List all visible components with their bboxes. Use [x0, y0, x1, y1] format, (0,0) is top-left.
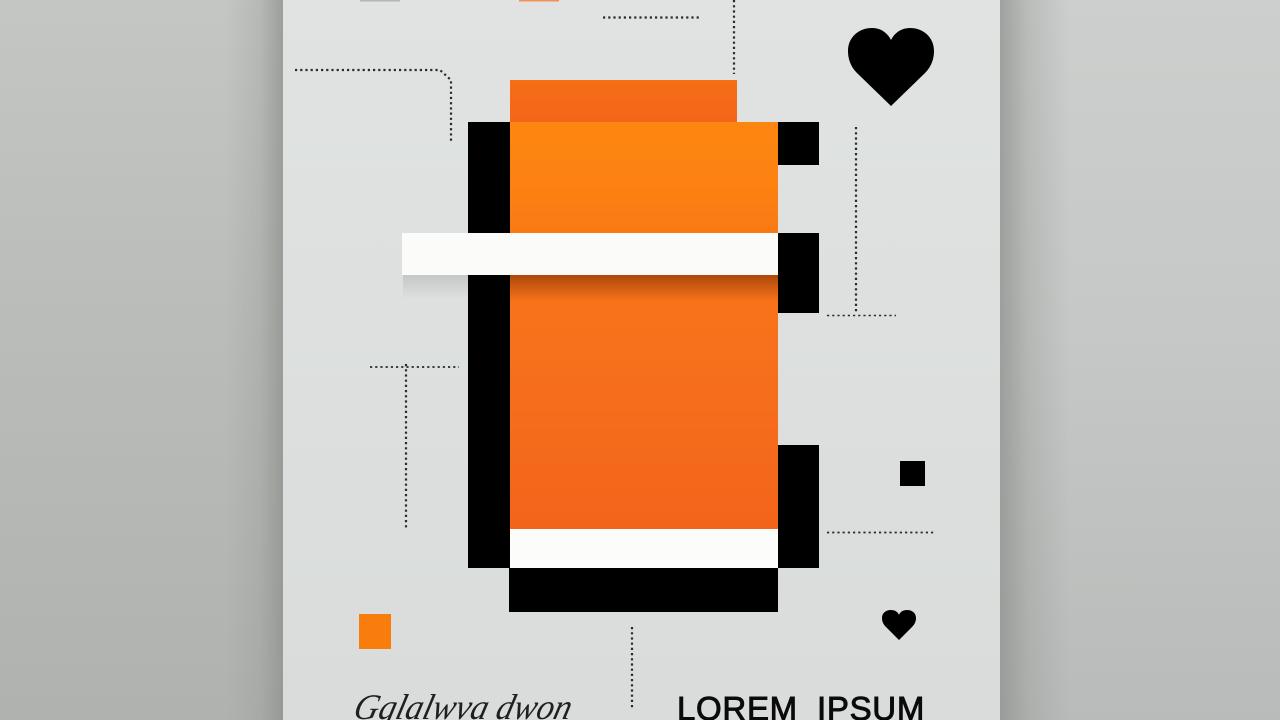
top edge marks — [360, 0, 559, 2]
dotted connector lines — [295, 0, 934, 710]
orange body — [510, 122, 778, 529]
icon: orange square — [359, 614, 391, 649]
orange top cap — [510, 80, 737, 122]
icon: small black square — [900, 461, 925, 486]
black right lower block — [778, 445, 819, 568]
black base — [509, 568, 778, 612]
icon: small heart — [882, 610, 916, 640]
main pixel illustration: orange battery block — [402, 80, 819, 612]
poster sheet — [283, 0, 1000, 720]
white bar shadow on poster — [403, 275, 468, 299]
white horizontal bar — [402, 233, 778, 275]
icon: large heart — [848, 28, 934, 106]
black left column — [468, 122, 510, 568]
black right middle block — [778, 233, 819, 313]
white base strip — [510, 529, 778, 568]
black right top block — [778, 122, 819, 165]
white bar shadow on orange — [510, 275, 778, 301]
